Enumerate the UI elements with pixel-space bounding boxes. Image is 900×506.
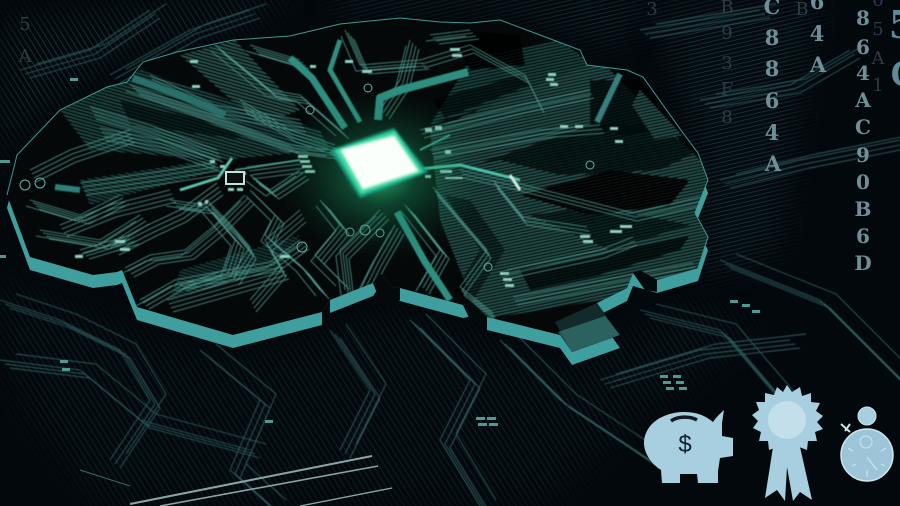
faint column: 5 xyxy=(19,14,31,35)
column 3: B xyxy=(855,197,871,221)
column 1: 8 xyxy=(765,25,779,50)
faint column xyxy=(18,0,886,128)
brain top circuit board xyxy=(9,18,708,352)
hex text columns xyxy=(18,0,900,275)
column 1: 6 xyxy=(765,88,779,113)
right lobe hatched traces xyxy=(430,30,710,320)
bottom bright traces xyxy=(80,456,392,506)
large clipped characters xyxy=(889,2,900,95)
clear tab at lower right xyxy=(555,303,620,352)
column 1 xyxy=(764,0,782,176)
left lobe hatched traces xyxy=(60,40,330,300)
column 3: 9 xyxy=(856,143,870,167)
faint column: 1 xyxy=(872,75,884,96)
trace bundles xyxy=(26,30,704,321)
faint column: F xyxy=(721,79,733,100)
notch shadows xyxy=(322,270,657,330)
faint column: 8 xyxy=(721,107,733,128)
column 3: C xyxy=(855,115,871,139)
column 2: A xyxy=(809,52,827,77)
column 3: D xyxy=(854,251,872,275)
thick traces around the chip xyxy=(55,40,620,300)
column 2 xyxy=(809,0,827,77)
small black component with pads xyxy=(226,172,244,184)
faint column: A xyxy=(18,46,32,67)
column 3 xyxy=(854,6,872,275)
column 1: 8 xyxy=(765,56,779,81)
faint column: 3 xyxy=(721,53,733,74)
icon: piggy bank: $ xyxy=(678,431,692,458)
icon: piggy bank xyxy=(644,410,733,483)
faint column: 5 xyxy=(872,19,884,40)
column 3: 8 xyxy=(856,6,870,30)
brain side wall xyxy=(7,31,708,365)
component pads xyxy=(75,48,632,287)
column 3: 6 xyxy=(856,224,870,248)
column 3: A xyxy=(854,88,871,112)
column 3: 4 xyxy=(856,61,870,85)
glowing chip xyxy=(330,128,428,198)
column 1: A xyxy=(764,151,782,176)
icon: stopwatch xyxy=(841,407,893,481)
column 3: 6 xyxy=(856,35,870,59)
column 2: 4 xyxy=(810,21,824,46)
column 3: 0 xyxy=(856,170,870,194)
faint column: A xyxy=(870,48,886,69)
icon: award ribbon xyxy=(752,385,823,501)
faint column: 9 xyxy=(721,23,733,44)
chip green glow xyxy=(290,102,470,248)
via rings xyxy=(20,84,594,271)
column 1: 4 xyxy=(765,120,779,145)
brain top outline xyxy=(7,18,708,268)
